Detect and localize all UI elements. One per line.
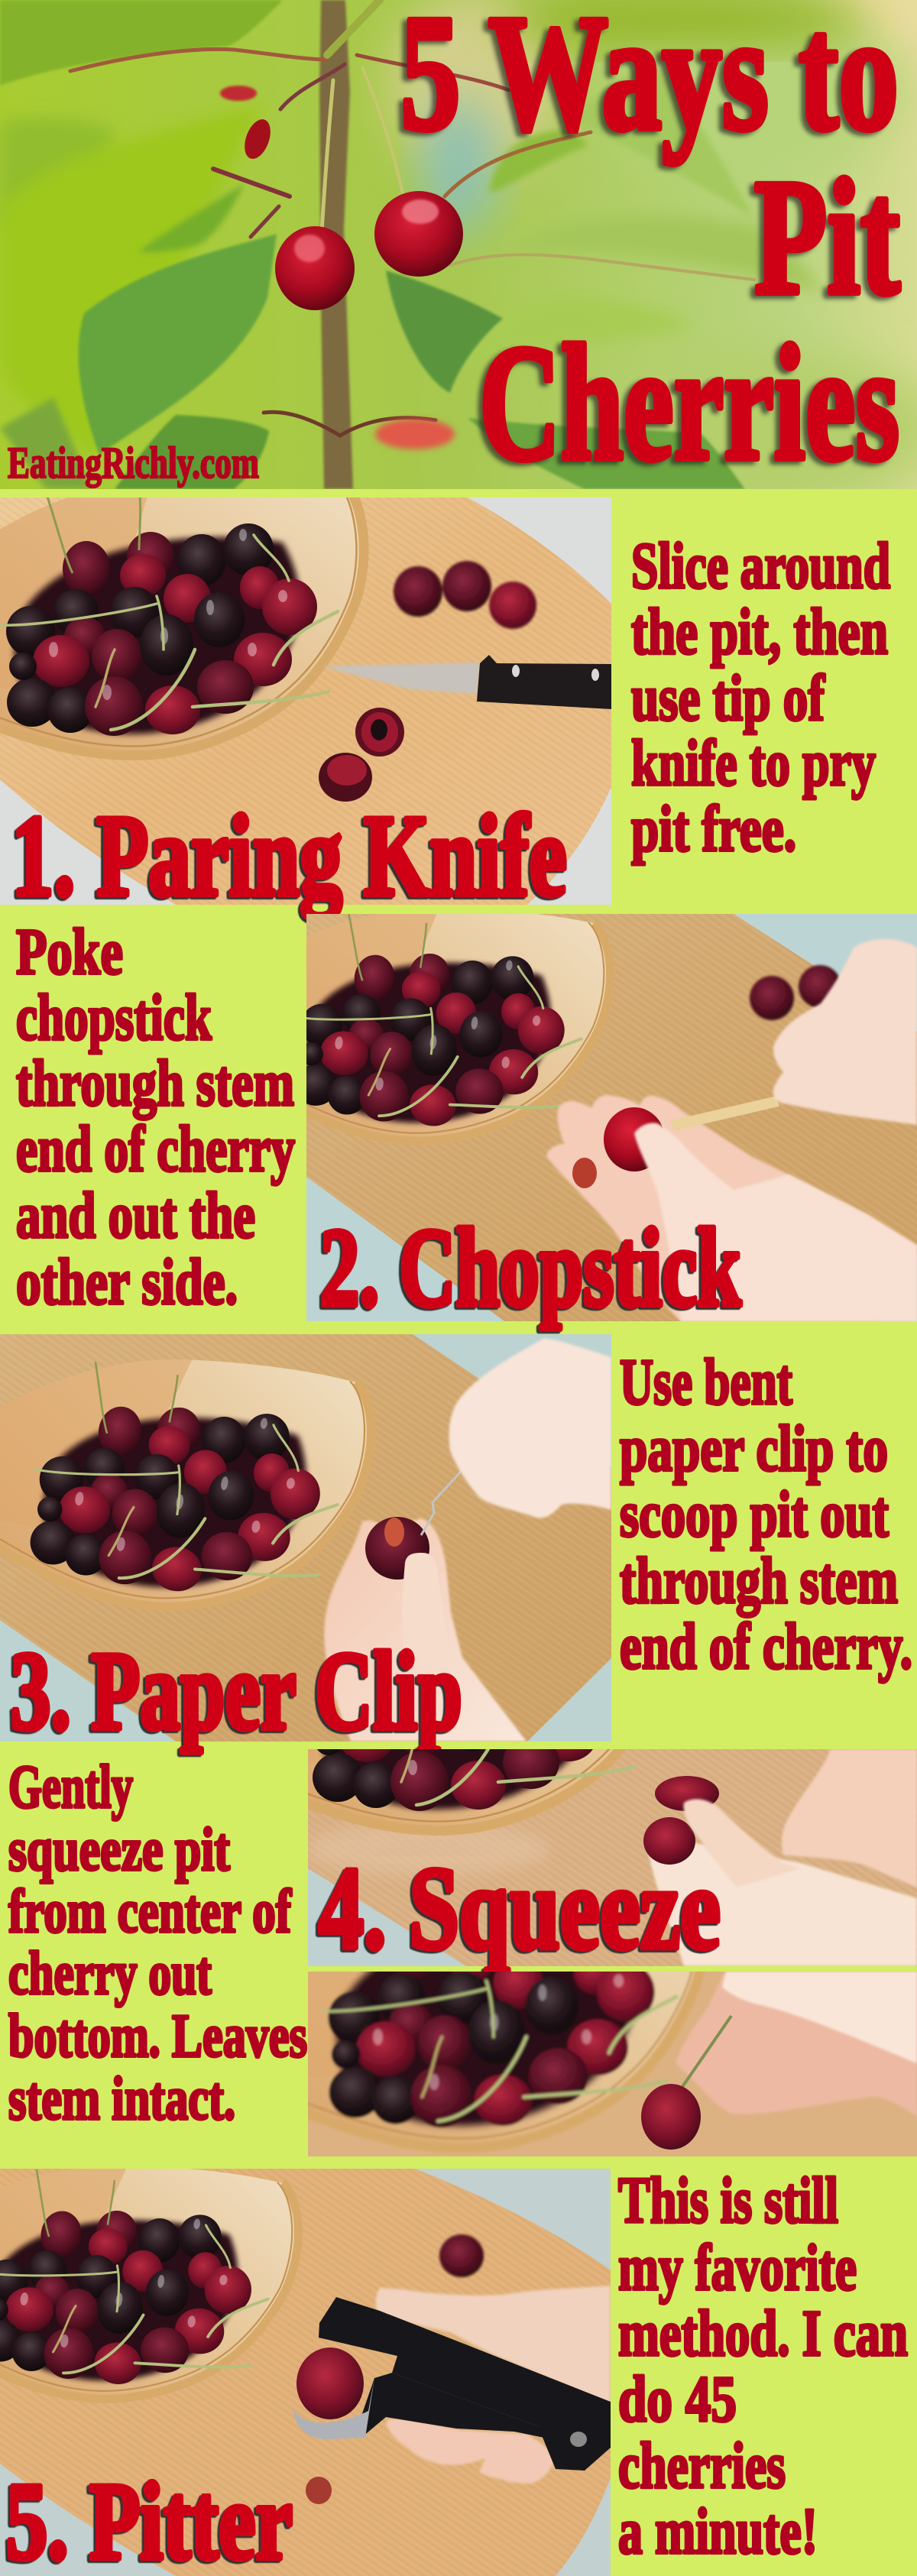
cutting board <box>306 914 917 1321</box>
heading: 3. Paper Clip: 3. Paper Clip <box>11 1628 462 1753</box>
basket of cherries <box>252 1546 669 1831</box>
finger on cherry <box>684 1799 801 1887</box>
heading: 2. Chopstick: 2. Chopstick <box>320 1205 741 1330</box>
text: chopstick instructions: other side. <box>16 1245 238 1318</box>
text: squeeze instructions: cherry out <box>8 1940 212 2007</box>
table corner <box>308 1868 466 1966</box>
text: paring knife instructions: pit free. <box>631 792 796 865</box>
text: pitter instructions: do 45 <box>618 2362 737 2435</box>
cutting board <box>0 2169 611 2576</box>
loose cherry <box>439 2234 484 2277</box>
site name: EatingRichly.com <box>8 438 259 488</box>
panel: chopstick photo <box>306 914 917 1321</box>
basket of cherries <box>0 471 364 756</box>
text: chopstick instructions: end of cherry <box>16 1112 295 1185</box>
text: chopstick instructions <box>16 915 295 1318</box>
hero photo: cherries on branch <box>0 0 917 504</box>
halved cherries <box>319 708 404 802</box>
chopstick <box>672 1101 778 1126</box>
whole cherries <box>394 561 536 629</box>
cutting board <box>0 497 611 905</box>
panel: pitter photo <box>0 2136 611 2576</box>
text: pitter instructions <box>618 2163 908 2568</box>
cherry pitter tool <box>293 2297 611 2471</box>
text: paring knife instructions: use tip of <box>631 661 825 734</box>
text: paper clip instructions: Use bent <box>620 1345 792 1418</box>
text: paper clip instructions <box>620 1345 912 1683</box>
panel: squeeze photo top <box>252 1546 917 1966</box>
cherry with stem <box>641 2016 731 2150</box>
text: squeeze instructions: from center of <box>8 1878 292 1946</box>
hand: lower holding cherry <box>324 1517 527 1742</box>
cherry right <box>374 191 463 277</box>
hand gripping pitter <box>376 2286 611 2407</box>
text: pitter instructions: This is still <box>618 2163 838 2237</box>
basket of cherries <box>0 2136 306 2423</box>
branch <box>319 0 353 489</box>
hand: lower <box>649 1839 917 1966</box>
text: squeeze instructions: Gently <box>8 1754 133 1821</box>
hand: lower with cherry <box>546 1095 917 1321</box>
panel: paring knife photo <box>0 471 611 905</box>
basket of cherries <box>0 1324 381 1637</box>
text: chopstick instructions: and out the <box>16 1178 255 1252</box>
hand <box>676 1972 917 2117</box>
basket of cherries <box>238 883 617 1162</box>
twigs and stems <box>70 0 754 436</box>
hand: upper holding clip <box>449 1338 611 1518</box>
paring knife <box>322 655 611 709</box>
text: chopstick instructions: through stem <box>16 1046 294 1120</box>
text: squeeze instructions: bottom. Leaves <box>8 2003 307 2070</box>
heading: 4. Squeeze: 4. Squeeze <box>319 1842 721 1974</box>
paper clip wire <box>421 1464 468 1535</box>
heading: 1. Paring Knife: 1. Paring Knife <box>11 792 567 921</box>
hand: upper holding chopstick <box>773 939 917 1125</box>
hand: upper <box>782 1749 917 1887</box>
text: chopstick instructions: chopstick <box>16 980 212 1054</box>
text: pitter instructions: cherries <box>618 2429 786 2502</box>
text: squeeze instructions: squeeze pit <box>8 1816 230 1884</box>
text: pitter instructions: a minute! <box>618 2494 818 2568</box>
small background cherries <box>220 86 455 449</box>
text: squeeze instructions <box>8 1754 307 2133</box>
panel: squeeze photo bottom <box>266 1849 917 2156</box>
text: chopstick instructions: Poke <box>16 915 123 988</box>
basket of cherries <box>266 1849 704 2148</box>
text: paring knife instructions <box>631 529 890 865</box>
cutting board <box>0 1334 611 1742</box>
title <box>400 0 900 494</box>
cherry left <box>275 226 355 310</box>
loose cherries <box>750 965 841 1020</box>
panel: paper clip photo <box>0 1324 611 1742</box>
squeezed cherry <box>643 1776 719 1865</box>
pit <box>306 2477 332 2504</box>
text: squeeze instructions: stem intact. <box>8 2066 235 2133</box>
